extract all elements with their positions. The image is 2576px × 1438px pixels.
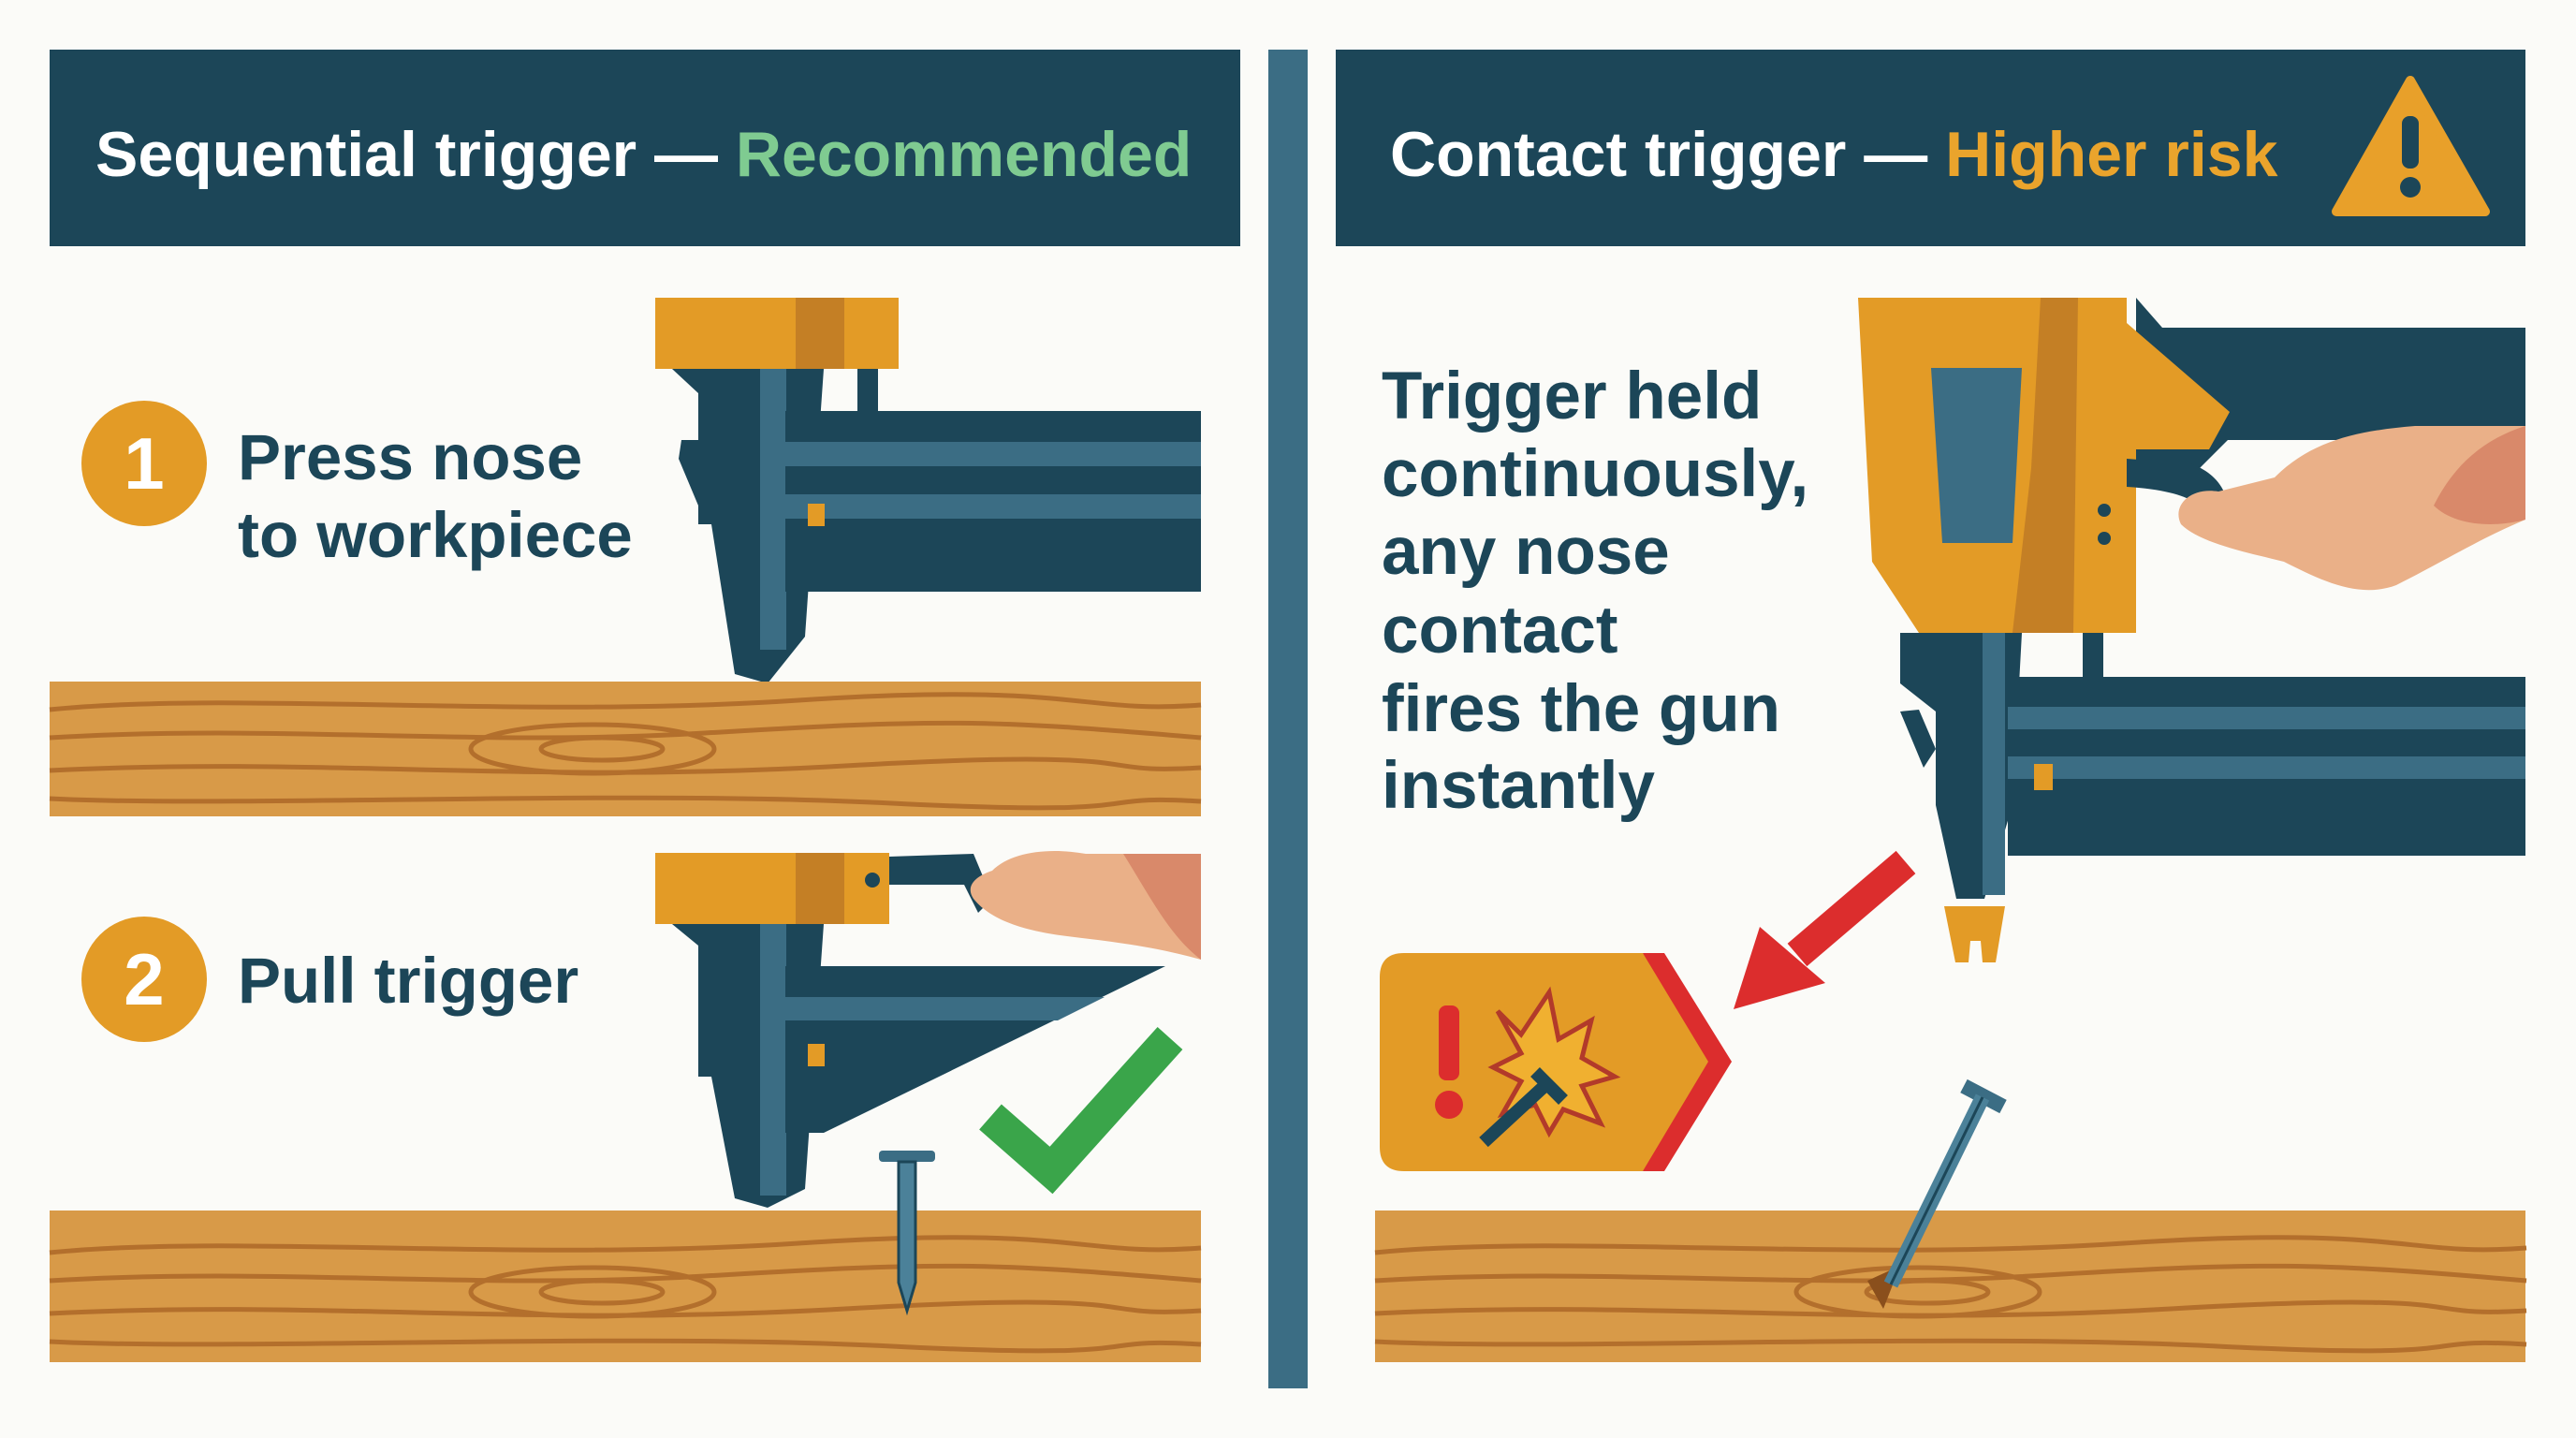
header: sequential — [50, 50, 1240, 246]
step 1: Press nose — [238, 421, 582, 493]
contact text: any nose — [1382, 515, 1670, 589]
header: sequential: Sequential trigger — Recommended — [95, 119, 1192, 190]
step 1 — [81, 401, 633, 571]
contact text: contact — [1382, 594, 1617, 668]
wood plank 2 — [50, 1211, 1201, 1362]
nail in wood — [879, 1151, 935, 1311]
arrow: red — [1734, 862, 1906, 1009]
hand — [971, 851, 1201, 960]
contact text — [1382, 360, 1827, 823]
contact text: fires the gun — [1382, 672, 1780, 746]
divider — [1268, 50, 1308, 1388]
wood plank contact — [1375, 1211, 2526, 1362]
step 1: to workpiece — [238, 499, 633, 571]
warning badge — [1380, 953, 1732, 1171]
hand — [2178, 426, 2525, 590]
nail gun 1 — [655, 298, 1201, 683]
nail gun 2 with hand — [655, 851, 1201, 1208]
step 2 — [81, 917, 578, 1042]
header: contact — [1336, 50, 2525, 246]
step 2: 2 — [124, 938, 165, 1020]
header: contact: Contact trigger — Higher risk — [1390, 119, 2278, 190]
contact text: instantly — [1382, 749, 1655, 823]
icon: check mark — [990, 1038, 1170, 1170]
nail gun contact with hand — [1858, 298, 2525, 962]
step 1: 1 — [124, 422, 165, 505]
wood plank 1 — [50, 682, 1201, 816]
contact text: continuously, — [1382, 437, 1808, 511]
icon: warning triangle — [2336, 81, 2485, 212]
tilted nail — [1891, 1086, 2003, 1284]
contact text: Trigger held — [1382, 360, 1762, 433]
step 2: Pull trigger — [238, 945, 578, 1017]
